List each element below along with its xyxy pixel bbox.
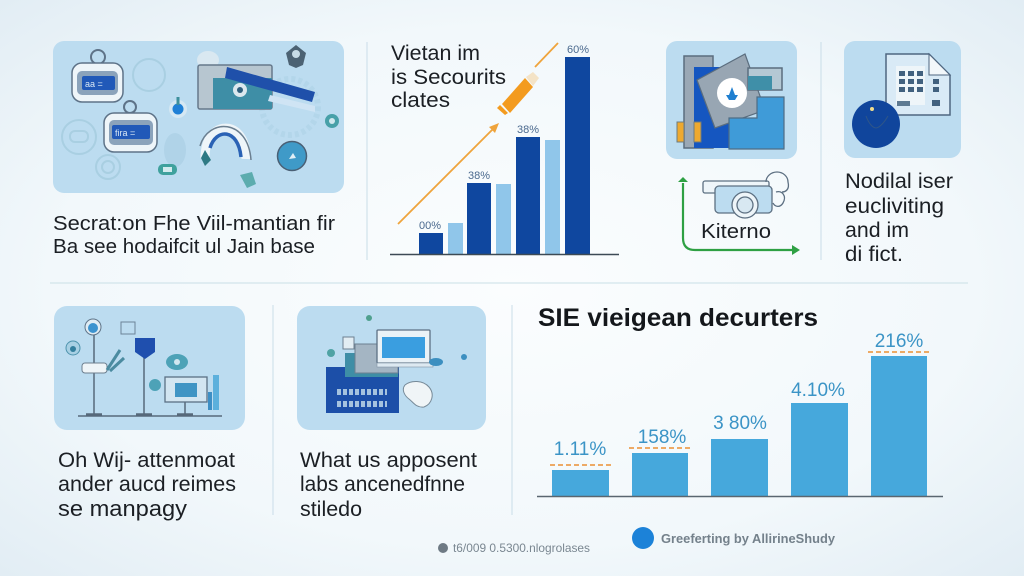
text: panel four caption: di fict. — [845, 243, 903, 266]
text: panel four caption: and im — [845, 219, 909, 242]
icon: round bubbles — [66, 341, 188, 391]
panel: document and globe illustration — [844, 41, 961, 158]
icon: top node — [85, 319, 101, 335]
panel: network poles illustration — [54, 306, 245, 430]
text: chart one heading: is Secourits — [391, 66, 506, 89]
text: chart one heading — [391, 42, 506, 112]
icon: machine — [703, 172, 788, 218]
text: panel five caption — [58, 449, 236, 521]
icon: orange pencil — [497, 72, 539, 115]
bar chart: sky blue percentages: 1.11% — [554, 439, 606, 460]
text: panel six caption: stiledo — [300, 498, 362, 521]
icon: white badge — [717, 78, 747, 108]
bar chart: rising blue bars: 38% — [468, 170, 490, 182]
text: panel one caption: Ba see hodaifcit ul Jain base — [53, 236, 315, 258]
panel: server and document illustration — [666, 41, 797, 159]
icon: round button — [278, 142, 306, 170]
text: panel one caption — [53, 213, 335, 258]
icon: side nodes — [327, 315, 467, 366]
icon: blue keyboard block — [326, 367, 399, 413]
bar chart: sky blue percentages: 4.10% — [791, 380, 845, 401]
icon: wrench — [107, 350, 124, 371]
panel: computer and keyboard illustration — [297, 306, 486, 430]
text: panel four caption: eucliviting — [845, 195, 944, 218]
text: chart one heading: clates — [391, 89, 450, 112]
text: panel one caption: Secrat:on Fhe Viil-mantian fir — [53, 213, 335, 235]
icon: device two — [104, 101, 157, 152]
icon: router box — [82, 363, 107, 373]
footer: credit with logo: Greeferting by AllirineShudy — [661, 531, 836, 546]
icon: faint gear — [262, 79, 318, 135]
icon: device one — [72, 50, 123, 102]
icon: teal monitor — [748, 68, 782, 90]
icon: navy globe — [852, 100, 900, 148]
text: machine label: Kiterno — [701, 221, 771, 243]
bar chart: rising blue bars: 00% — [419, 220, 441, 232]
bar chart: sky blue percentages: 216% — [875, 331, 923, 352]
bar chart: rising blue bars: 38% — [517, 124, 539, 136]
icon: white blob — [403, 381, 432, 407]
bar chart: rising blue bars — [390, 44, 619, 254]
text: panel six caption — [300, 449, 477, 521]
icon: laptop — [377, 330, 433, 367]
icon: blue dot — [169, 97, 187, 118]
footer: credit with logo — [632, 527, 836, 549]
text: panel six caption: labs ancenedfnne — [300, 473, 465, 496]
icon: monitor with bars — [165, 375, 219, 410]
text: panel five caption: ander aucd reimes — [58, 473, 236, 496]
arrow: orange trend arrow — [398, 43, 558, 224]
text: panel five caption: se manpagy — [58, 496, 187, 521]
icon: small teal tokens — [158, 114, 339, 188]
icon: faint circles — [62, 59, 186, 179]
text: panel six caption: What us apposent — [300, 449, 477, 472]
diagram: green axis with machine — [678, 172, 800, 255]
icon: small tower — [121, 322, 135, 334]
bar chart: sky blue percentages: 3 80% — [713, 413, 767, 434]
icon: diamond badge — [286, 45, 306, 68]
bar chart: sky blue percentages — [537, 331, 943, 496]
panel: security devices illustration — [53, 41, 344, 193]
heading: lower chart title: SIE vieigean decurters — [538, 304, 818, 332]
text: chart one heading: Vietan im — [391, 42, 480, 65]
icon: device two: fira = — [115, 128, 135, 138]
icon: card with banner — [197, 51, 315, 112]
bar chart: sky blue percentages: 158% — [638, 427, 686, 448]
text: panel four caption: Nodilal iser — [845, 170, 953, 193]
icon: shield — [135, 338, 155, 359]
text: panel four caption — [845, 170, 953, 266]
text: panel five caption: Oh Wij- attenmoat — [58, 449, 235, 472]
bar chart: rising blue bars: 60% — [567, 44, 589, 56]
icon: curved arrow arch — [200, 126, 251, 166]
footer: source note: t6/009 0.5300.nlogrolases — [453, 541, 590, 555]
icon: device one: aa = — [85, 79, 103, 89]
icon: document — [886, 54, 950, 115]
